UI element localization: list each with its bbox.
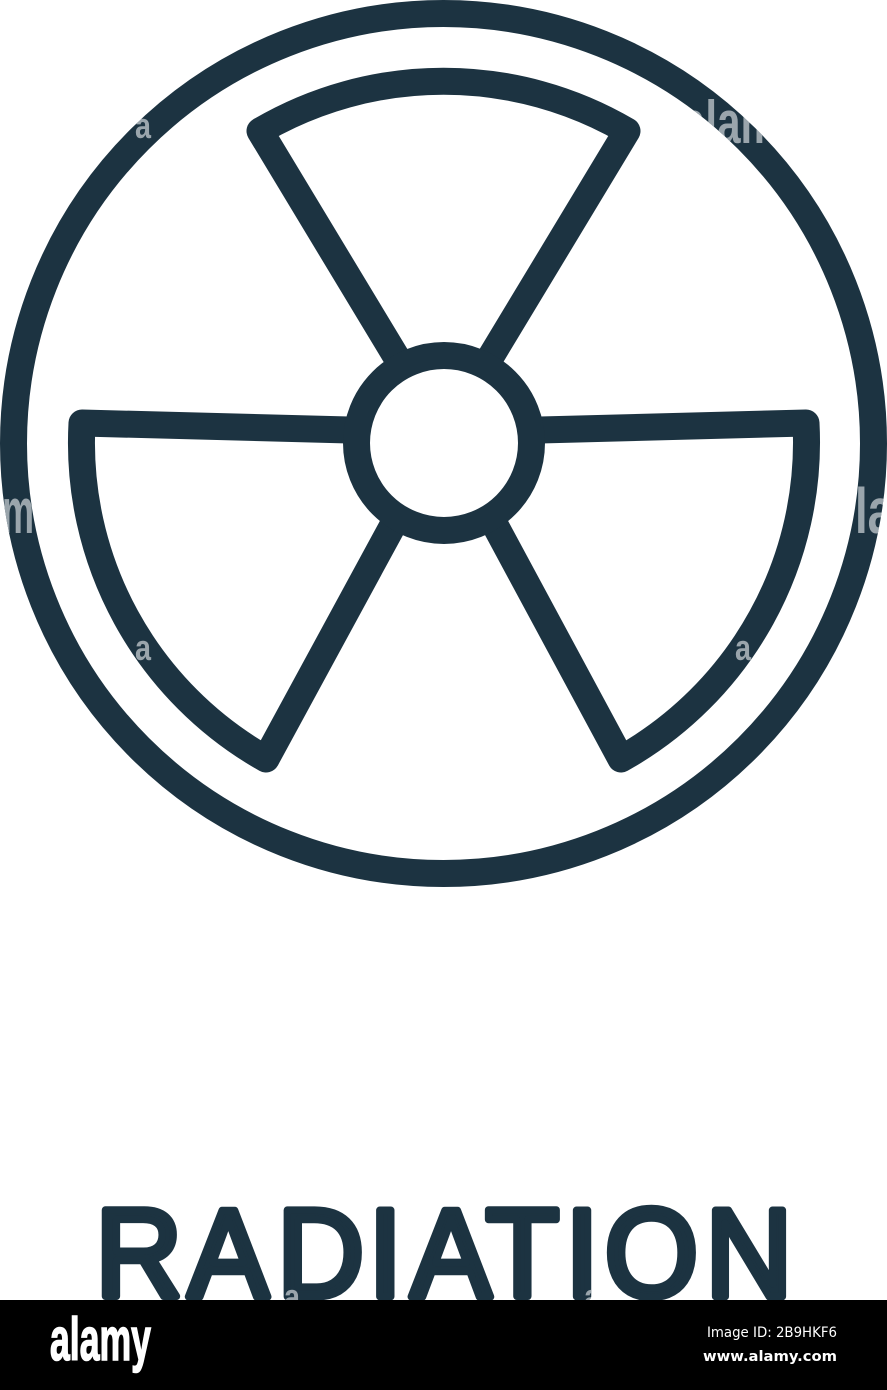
icon: radiation symbol	[14, 14, 874, 874]
website: www.alamy.com	[703, 1349, 837, 1365]
watermark fragments: a	[284, 1276, 301, 1317]
image id: Image ID: 2B9HKF6	[707, 1325, 837, 1341]
footer bar	[0, 1300, 887, 1390]
watermark fragments: a	[135, 627, 152, 668]
icon: top blade	[260, 81, 627, 358]
icon: left blade	[81, 423, 392, 759]
watermark fragments: a	[584, 1276, 601, 1317]
icon: right blade	[496, 423, 807, 759]
title: RADIATION	[96, 1183, 792, 1323]
watermark fragments: m	[2, 475, 34, 547]
icon: centre ring	[356, 356, 532, 530]
watermark fragments: a	[135, 105, 152, 146]
watermark fragments: a	[735, 627, 752, 668]
icon: outer ring	[14, 14, 874, 874]
logo: alamy: alamy	[50, 1306, 151, 1373]
watermark fragments: alam	[682, 89, 778, 156]
